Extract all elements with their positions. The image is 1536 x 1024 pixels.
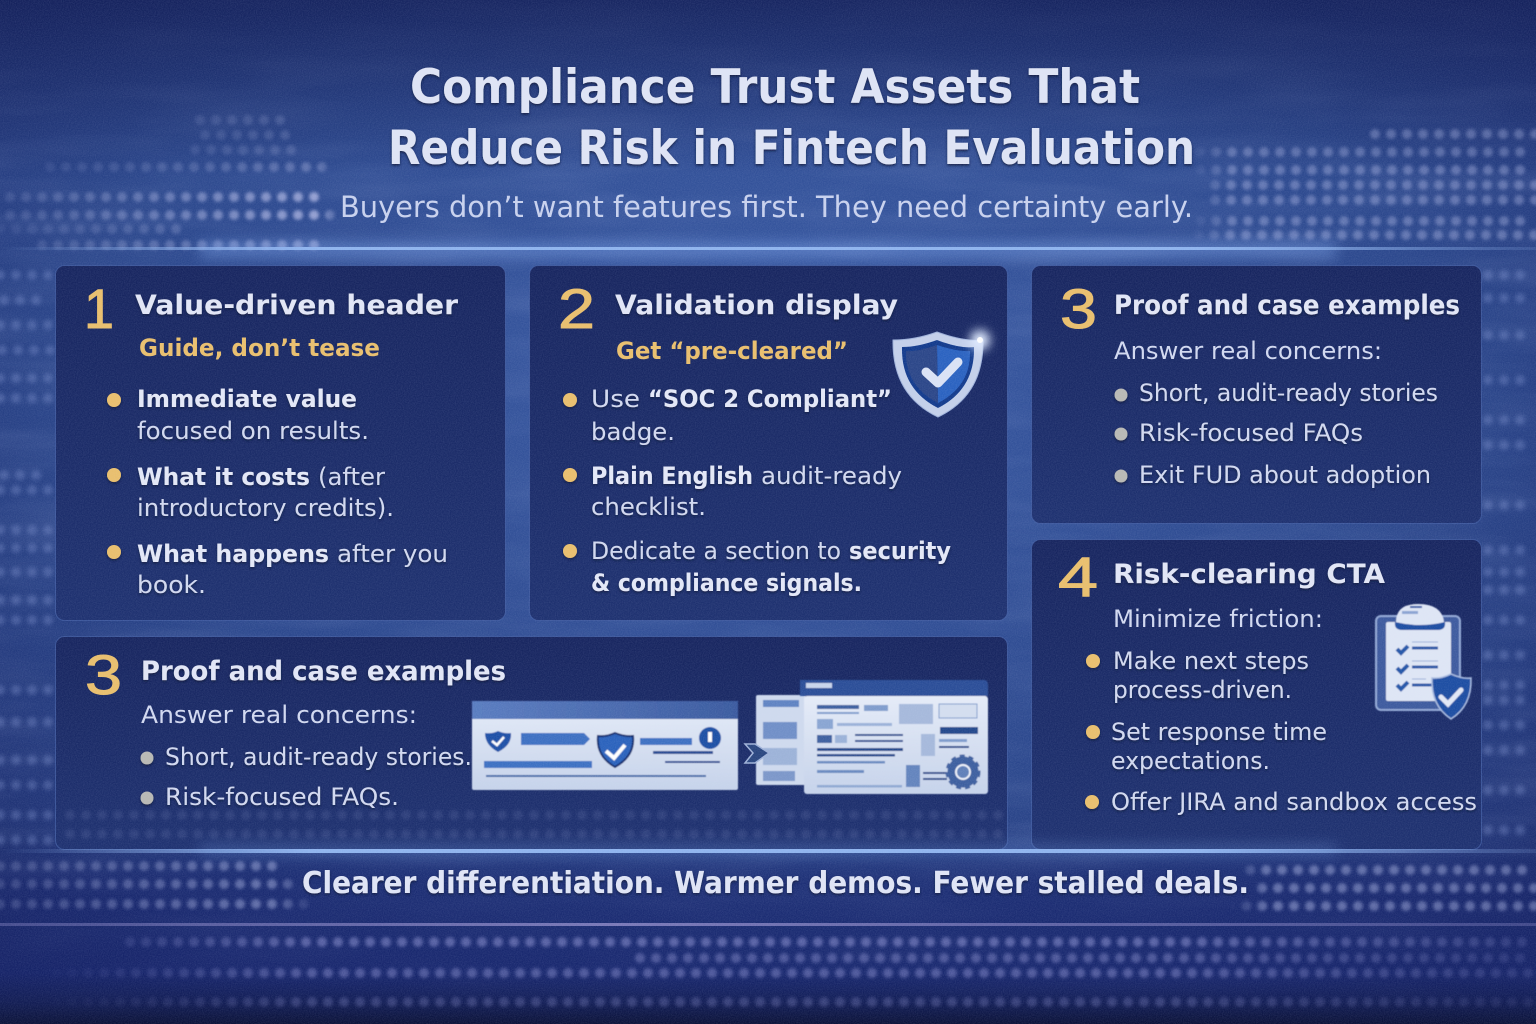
bullet list: Immediate value bbox=[137, 385, 357, 413]
number 2: 2 bbox=[558, 277, 595, 340]
intro: Minimize friction: bbox=[1113, 605, 1323, 633]
icon: shield check bbox=[893, 330, 990, 417]
number 3: 3 bbox=[85, 643, 122, 706]
panel 1: value-driven header bbox=[56, 266, 506, 620]
bullet list: process-driven. bbox=[1113, 676, 1292, 704]
heading: Proof and case examples bbox=[141, 656, 506, 687]
intro: Answer real concerns: bbox=[141, 701, 417, 729]
arrow bbox=[745, 744, 769, 763]
bullet list: Make next steps bbox=[1113, 647, 1309, 675]
heading: Value-driven header bbox=[135, 290, 459, 321]
bullet list: What happens bbox=[137, 540, 329, 568]
side streaks bbox=[0, 275, 1536, 840]
title: Compliance Trust Assets That bbox=[410, 60, 1140, 115]
heading: Risk-clearing CTA bbox=[1113, 559, 1385, 590]
panel 3 bottom: proof and case examples bbox=[56, 636, 1008, 850]
bullet list bbox=[107, 385, 448, 599]
title: Reduce Risk in Fintech Evaluation bbox=[388, 121, 1195, 176]
bullet list: Set response time bbox=[1111, 718, 1327, 746]
intro: Answer real concerns: bbox=[1114, 337, 1382, 365]
bullet list: Dedicate a section to bbox=[591, 537, 841, 565]
illustration: large report window bbox=[800, 680, 988, 794]
heading: Validation display bbox=[615, 290, 898, 321]
glow line: bottom bbox=[0, 846, 1536, 854]
bullet list bbox=[1114, 379, 1438, 489]
bullet list: Risk-focused FAQs. bbox=[165, 783, 399, 811]
bullet list: focused on results. bbox=[137, 417, 369, 445]
title bbox=[388, 60, 1195, 176]
tagline: Get “pre-cleared” bbox=[616, 337, 848, 365]
bullet list: Short, audit-ready stories bbox=[1139, 379, 1438, 407]
bullet list: checklist. bbox=[591, 493, 706, 521]
glow line: top bbox=[0, 243, 1536, 257]
bullet list: badge. bbox=[591, 418, 675, 446]
tagline: Guide, don’t tease bbox=[139, 334, 380, 362]
bullet list: Use bbox=[591, 385, 640, 413]
bullet list: Short, audit-ready stories. bbox=[165, 743, 472, 771]
bullet list bbox=[563, 385, 951, 597]
number 3: 3 bbox=[1060, 277, 1097, 340]
bullet list: Exit FUD about adoption bbox=[1139, 461, 1431, 489]
number 1: 1 bbox=[84, 277, 114, 340]
illustration: small window bbox=[756, 695, 806, 785]
bullet list: introductory credits). bbox=[137, 494, 394, 522]
footer statement: Clearer differentiation. Warmer demos. Fewer stalled deals. bbox=[302, 866, 1249, 901]
number 4: 4 bbox=[1058, 545, 1098, 608]
bullet list: audit-ready bbox=[761, 462, 902, 490]
heading: Proof and case examples bbox=[1114, 290, 1460, 321]
bullet list: (after bbox=[318, 463, 385, 491]
bullet list bbox=[1085, 647, 1477, 816]
subtitle: Buyers don’t want features first. They need certainty early. bbox=[340, 190, 1193, 224]
bullet list: Plain English bbox=[591, 462, 753, 490]
bullet list: What it costs bbox=[137, 463, 310, 491]
bullet list: “SOC 2 Compliant” bbox=[648, 385, 892, 413]
bullet list: & compliance signals. bbox=[591, 569, 862, 597]
bullet list: security bbox=[849, 537, 951, 565]
bullet list: book. bbox=[137, 571, 206, 599]
panel 4: risk-clearing CTA bbox=[1032, 540, 1482, 850]
bullet list: Offer JIRA and sandbox access bbox=[1111, 788, 1477, 816]
panel 3 right: proof and case examples bbox=[1032, 266, 1482, 524]
panel 2: validation display bbox=[530, 266, 1008, 620]
bullet list: after you bbox=[337, 540, 448, 568]
bullet list bbox=[140, 743, 472, 811]
illustration: validation window bbox=[472, 701, 738, 790]
bullet list: Risk-focused FAQs bbox=[1139, 419, 1363, 447]
bullet list: expectations. bbox=[1111, 747, 1270, 775]
icon: clipboard with shield bbox=[1376, 604, 1471, 719]
